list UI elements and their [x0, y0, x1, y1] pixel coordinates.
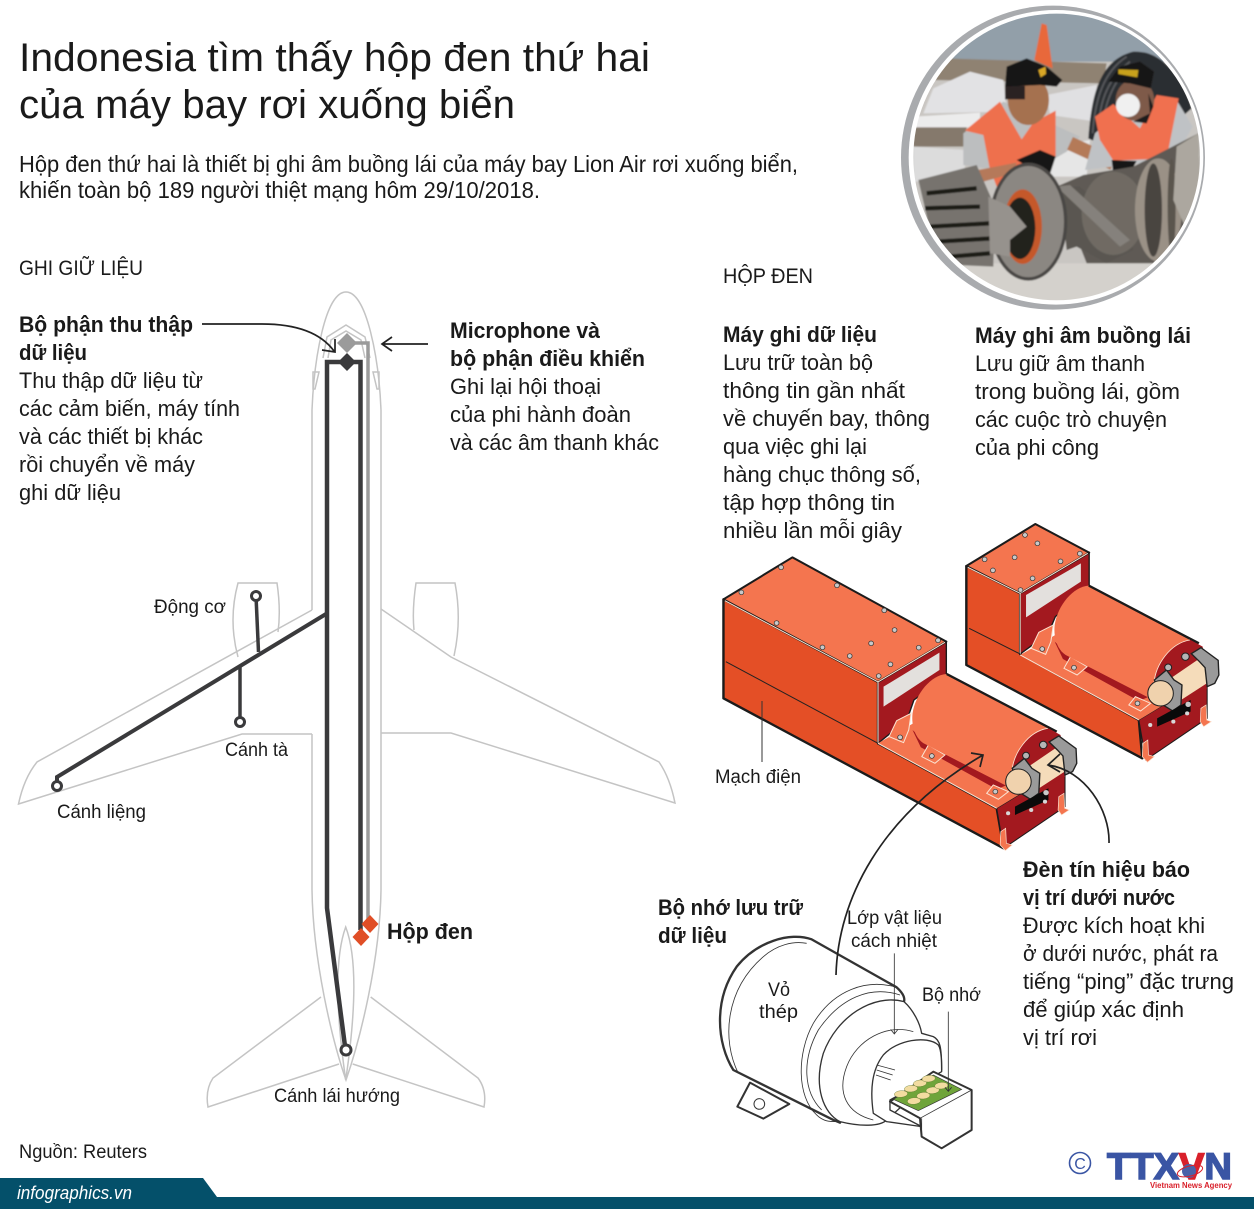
green circuit board — [893, 1075, 962, 1111]
illustration: orange recorders — [723, 524, 1219, 851]
labels: memory parts: Vỏ — [768, 980, 790, 1001]
plane labels: Động cơ — [154, 597, 226, 618]
arrow: to locator beacon — [1048, 754, 1109, 843]
logo: TTXVN: Vietnam News Agency — [1150, 1181, 1233, 1190]
arrow: to memory unit — [836, 753, 983, 975]
mounting foot — [737, 1083, 789, 1119]
logo: TTXVN: TTXVN — [1107, 1146, 1232, 1187]
title: Indonesia tìm thấy hộp đen thứ hai — [19, 36, 650, 80]
text block: memory unit: Bộ nhớ lưu trữ — [658, 895, 803, 920]
chip holder — [872, 1040, 942, 1127]
plane diagram — [18, 292, 675, 1107]
cockpit outline — [313, 325, 379, 389]
text block: microphone and control unit: bộ phận điều khiển — [450, 346, 645, 371]
text block: underwater locator beacon: vị trí dưới nước — [1023, 885, 1175, 910]
text block: flight data recorder: nhiều lần mỗi giây — [723, 518, 902, 543]
gray microphone wire — [347, 343, 368, 922]
tail fin — [338, 927, 354, 1080]
microphone diamond — [337, 333, 357, 353]
labels: memory parts — [759, 908, 981, 1023]
text block: flight data recorder: qua việc ghi lại — [723, 434, 867, 459]
engine wire — [256, 596, 258, 652]
left tailplane — [207, 997, 339, 1107]
insulation rings — [801, 984, 897, 1122]
small recorder — [966, 524, 1219, 762]
right wing — [381, 609, 675, 803]
left engine — [233, 583, 279, 657]
text block: microphone and control unit: Microphone và — [450, 318, 601, 343]
text block: cockpit voice recorder: của phi công — [975, 435, 1099, 460]
text block: data collection unit: Bộ phận thu thập — [19, 312, 193, 337]
sensor nodes — [52, 592, 351, 1055]
text block: data collection unit: rồi chuyển về máy — [19, 452, 195, 477]
text block: underwater locator beacon: Đèn tín hiệu báo — [1023, 857, 1190, 882]
text block: data collection unit: và các thiết bị khác — [19, 424, 203, 449]
memory chips — [894, 1075, 948, 1105]
insulation arrow — [891, 953, 898, 1034]
text block: data collection unit: ghi dữ liệu — [19, 480, 121, 505]
right tailplane — [353, 997, 485, 1107]
plane labels: Cánh tà — [225, 740, 288, 761]
text block: flight data recorder: tập hợp thông tin — [723, 490, 895, 515]
text block: microphone and control unit: và các âm thanh khác — [450, 430, 659, 455]
plane labels — [57, 597, 473, 1107]
text block: flight data recorder: thông tin gần nhất — [723, 378, 905, 403]
illustration: memory module — [720, 937, 972, 1148]
flap wire — [238, 665, 242, 722]
text block: microphone and control unit — [450, 318, 659, 455]
text block: underwater locator beacon — [1023, 857, 1234, 1050]
labels: memory parts: cách nhiệt — [851, 931, 938, 952]
logo: TTXVN: C — [1074, 1156, 1086, 1173]
text block: cockpit voice recorder: Máy ghi âm buồng lái — [975, 323, 1191, 348]
title — [19, 36, 650, 127]
text block: flight data recorder: về chuyến bay, thông — [723, 406, 930, 431]
labels: memory parts: Lớp vật liệu — [847, 908, 942, 929]
left wing — [18, 610, 312, 804]
labels: memory parts: thép — [759, 1002, 798, 1023]
large recorder — [723, 557, 1077, 851]
text block: underwater locator beacon: tiếng “ping” đặc trưng — [1023, 969, 1234, 994]
text block: microphone and control unit: của phi hành đoàn — [450, 402, 631, 427]
text block: memory unit — [658, 895, 803, 948]
source: Nguồn: Reuters — [19, 1142, 147, 1163]
text block: data collection unit: Thu thập dữ liệu từ — [19, 368, 203, 393]
data unit diamond — [338, 353, 356, 371]
label: circuit board — [715, 701, 801, 788]
text block: flight data recorder: Lưu trữ toàn bộ — [723, 350, 873, 375]
arrow: microphone — [382, 337, 428, 351]
labels: memory parts: Bộ nhớ — [922, 985, 981, 1006]
black box diamonds — [352, 915, 378, 946]
section heading: black box: HỘP ĐEN — [723, 265, 813, 288]
text block: flight data recorder: hàng chục thông số, — [723, 462, 921, 487]
text block: underwater locator beacon: ở dưới nước, phát ra — [1023, 941, 1219, 966]
memory chip casing — [890, 1072, 972, 1148]
text block: cockpit voice recorder — [975, 323, 1191, 460]
text block: flight data recorder — [723, 322, 930, 543]
plane labels: Cánh liệng — [57, 802, 146, 823]
wing wire — [57, 614, 326, 786]
footer band: infographics.vn — [17, 1183, 132, 1203]
photo: wreckage and investigators — [900, 0, 1220, 320]
text block: data collection unit: các cảm biến, máy tính — [19, 396, 240, 421]
text block: data collection unit: dữ liệu — [19, 340, 87, 365]
memory arrow — [945, 1012, 952, 1091]
subtitle text — [19, 151, 798, 203]
text block: data collection unit — [19, 312, 240, 505]
subtitle text: khiến toàn bộ 189 người thiệt mạng hôm 29/10/2018. — [19, 177, 540, 203]
text block: cockpit voice recorder: trong buồng lái, gồm — [975, 379, 1180, 404]
fuselage outline — [312, 292, 381, 1080]
text block: underwater locator beacon: để giúp xác định — [1023, 997, 1184, 1022]
steel casing — [720, 937, 904, 1123]
text block: cockpit voice recorder: Lưu giữ âm thanh — [975, 351, 1145, 376]
text block: underwater locator beacon: Được kích hoạt khi — [1023, 913, 1205, 938]
label: circuit board: Mạch điện — [715, 767, 801, 788]
subtitle text: Hộp đen thứ hai là thiết bị ghi âm buồng lái của máy bay Lion Air rơi xuống biển, — [19, 151, 798, 177]
text block: memory unit: dữ liệu — [658, 923, 727, 948]
plane labels: Cánh lái hướng — [274, 1086, 400, 1107]
dark data wires — [327, 362, 360, 1050]
title: của máy bay rơi xuống biển — [19, 83, 515, 127]
right engine — [413, 583, 458, 656]
section heading: data recorder: GHI GIỮ LIỆU — [19, 256, 143, 280]
text block: flight data recorder: Máy ghi dữ liệu — [723, 322, 877, 347]
text block: microphone and control unit: Ghi lại hội thoại — [450, 374, 601, 399]
footer band — [0, 1178, 1254, 1209]
text block: cockpit voice recorder: các cuộc trò chuyện — [975, 407, 1167, 432]
text block: underwater locator beacon: vị trí rơi — [1023, 1025, 1097, 1050]
plane labels: Hộp đen — [387, 919, 473, 944]
arrow: data collection unit — [202, 324, 335, 352]
